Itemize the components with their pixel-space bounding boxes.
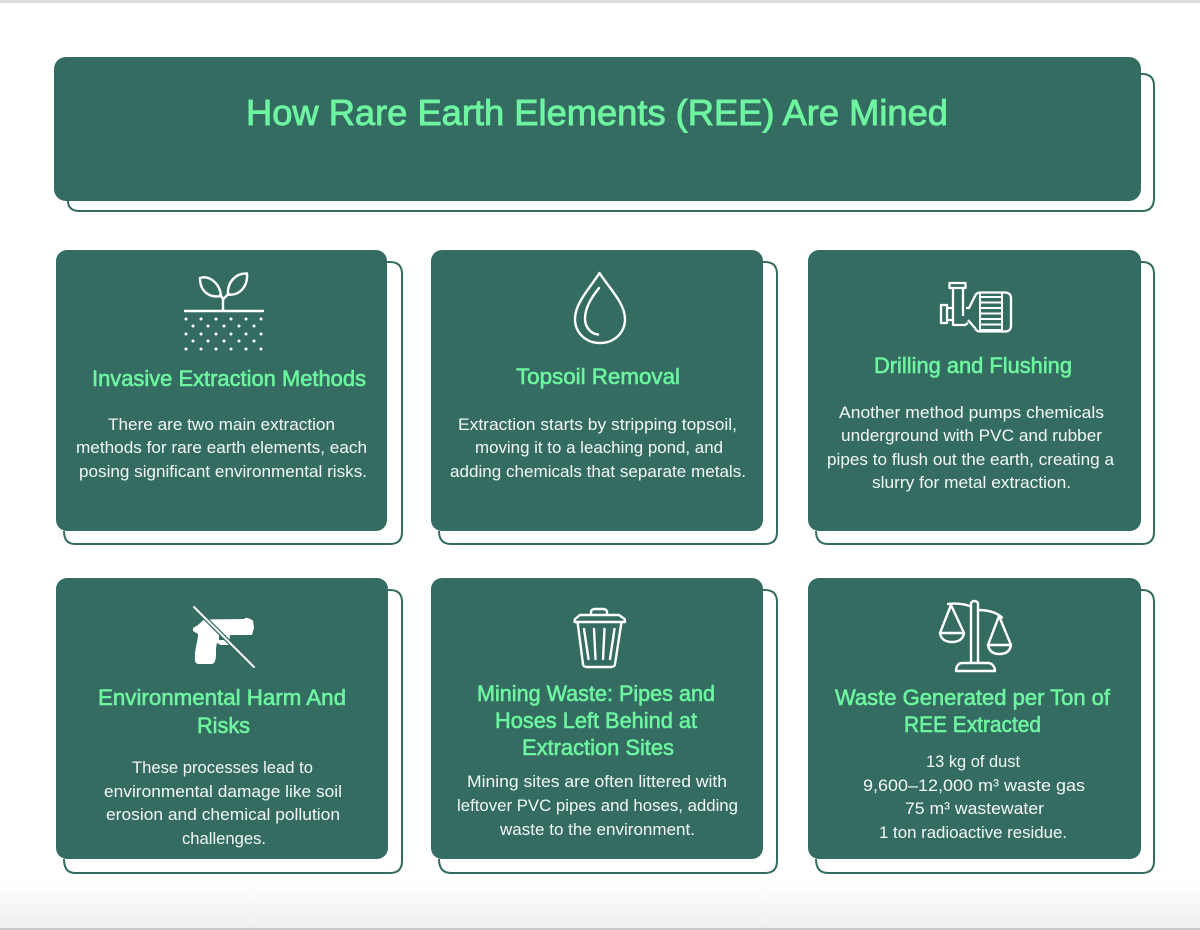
panel: mining waste [431, 578, 777, 873]
text block: environmental damage like soil [104, 782, 342, 801]
heading: Environmental Harm And [98, 685, 346, 710]
icon: plant in soil [184, 273, 263, 350]
heading: Risks [197, 713, 250, 738]
text block [863, 752, 1085, 842]
text block: leftover PVC pipes and hoses, adding [457, 796, 738, 815]
heading: Waste Generated per Ton of [835, 685, 1111, 710]
title: How Rare Earth Elements (REE) Are Mined [246, 92, 948, 133]
text block: slurry for metal extraction. [872, 473, 1071, 492]
text block: Mining sites are often littered with [467, 772, 727, 791]
panel: topsoil removal [431, 250, 777, 544]
text block: Extraction starts by stripping topsoil, [458, 415, 737, 434]
icon: water drop [575, 273, 625, 343]
text block: challenges. [182, 829, 266, 848]
heading: Extraction Sites [522, 735, 674, 760]
text block: Another method pumps chemicals [839, 403, 1104, 422]
icon: trash can [574, 609, 625, 667]
panel: environmental harm and risks [56, 578, 402, 873]
text block: adding chemicals that separate metals. [450, 462, 746, 481]
heading: Hoses Left Behind at [495, 708, 697, 733]
heading: Topsoil Removal [516, 364, 680, 389]
heading [98, 685, 346, 738]
heading [835, 685, 1111, 737]
text block: underground with PVC and rubber [841, 426, 1102, 445]
icon: crossed-out pistol [193, 606, 255, 668]
icon: pump [941, 283, 1011, 332]
text block: posing significant environmental risks. [79, 462, 367, 481]
text block: methods for rare earth elements, each [76, 438, 367, 457]
text block: These processes lead to [132, 758, 313, 777]
panel: invasive extraction methods [56, 250, 402, 544]
text block: pipes to flush out the earth, creating a [827, 450, 1115, 469]
text block: moving it to a leaching pond, and [475, 438, 723, 457]
text block: 75 m³ wastewater [905, 799, 1044, 818]
text block: waste to the environment. [499, 820, 695, 839]
text block [457, 772, 738, 839]
text block [827, 403, 1115, 492]
heading: Invasive Extraction Methods [92, 366, 366, 391]
heading: Drilling and Flushing [874, 353, 1072, 378]
heading: Mining Waste: Pipes and [477, 681, 715, 706]
text block [76, 415, 367, 481]
heading: REE Extracted [904, 712, 1041, 737]
text block: 13 kg of dust [926, 752, 1020, 771]
text block: 9,600–12,000 m³ waste gas [863, 776, 1085, 795]
panel: drilling and flushing [808, 250, 1154, 544]
panel: title banner [54, 57, 1154, 211]
heading [477, 681, 715, 760]
text block: There are two main extraction [108, 415, 335, 434]
icon: balance scale [940, 601, 1011, 671]
text block [104, 758, 342, 848]
text block: 1 ton radioactive residue. [879, 823, 1067, 842]
text block: erosion and chemical pollution [106, 805, 340, 824]
text block [450, 415, 746, 481]
panel: waste generated per ton [808, 578, 1154, 873]
